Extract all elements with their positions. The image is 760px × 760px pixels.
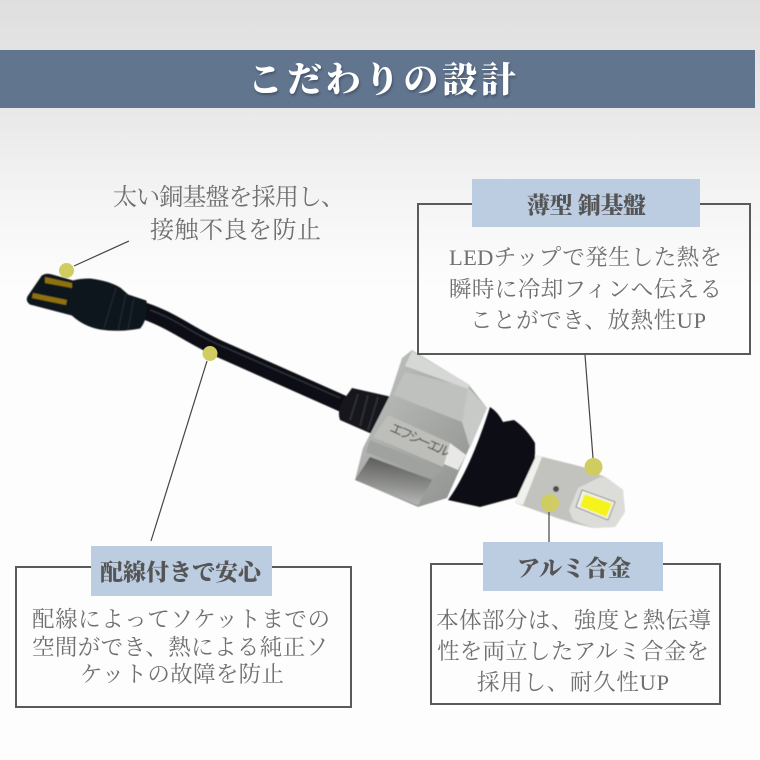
- silver heat sink body: [355, 350, 487, 507]
- copper board plate: [515, 455, 625, 528]
- panel: with wiring: ケットの故障を防止: [80, 662, 284, 687]
- plug connector: [27, 274, 146, 330]
- strain relief boot: [339, 388, 392, 434]
- panel: aluminium alloy: 本体部分は、強度と熱伝導: [436, 608, 711, 633]
- black collar ring: [448, 407, 535, 507]
- panel: aluminium alloy: 性を両立したアルミ合金を: [437, 639, 709, 664]
- brand label on body: エフシーエル: [388, 420, 452, 460]
- callout: thick copper board text: 接触不良を防止: [150, 217, 321, 244]
- title banner: [0, 50, 755, 108]
- product photo: LED bulb with cable: [27, 274, 625, 528]
- leader lines: [74, 241, 593, 542]
- callout: thick copper board text: [113, 184, 345, 244]
- panel: thin copper board: 薄型 銅基盤: [527, 193, 646, 218]
- title banner: こだわりの設計: [248, 61, 516, 100]
- marker dots: [59, 263, 602, 512]
- panel: with wiring: [16, 546, 351, 707]
- panel: thin copper board: [418, 179, 750, 354]
- panel: thin copper board: ことができ、放熱性UP: [470, 308, 706, 333]
- callout: thick copper board text: 太い銅基盤を採用し、: [113, 184, 345, 211]
- LED chip: [576, 490, 615, 520]
- panel: thin copper board: LEDチップで発生した熱を: [449, 245, 722, 270]
- panel: aluminium alloy: [431, 542, 720, 704]
- panel: aluminium alloy: アルミ合金: [517, 556, 631, 581]
- panel: aluminium alloy: 採用し、耐久性UP: [477, 670, 669, 695]
- cable: [138, 309, 348, 406]
- panel: thin copper board: 瞬時に冷却フィンへ伝える: [449, 277, 722, 302]
- panel: with wiring: 配線付きで安心: [100, 559, 265, 585]
- panel: with wiring: 配線によってソケットまでの: [32, 607, 330, 632]
- panel: with wiring: 空間ができ、熱による純正ソ: [32, 635, 328, 660]
